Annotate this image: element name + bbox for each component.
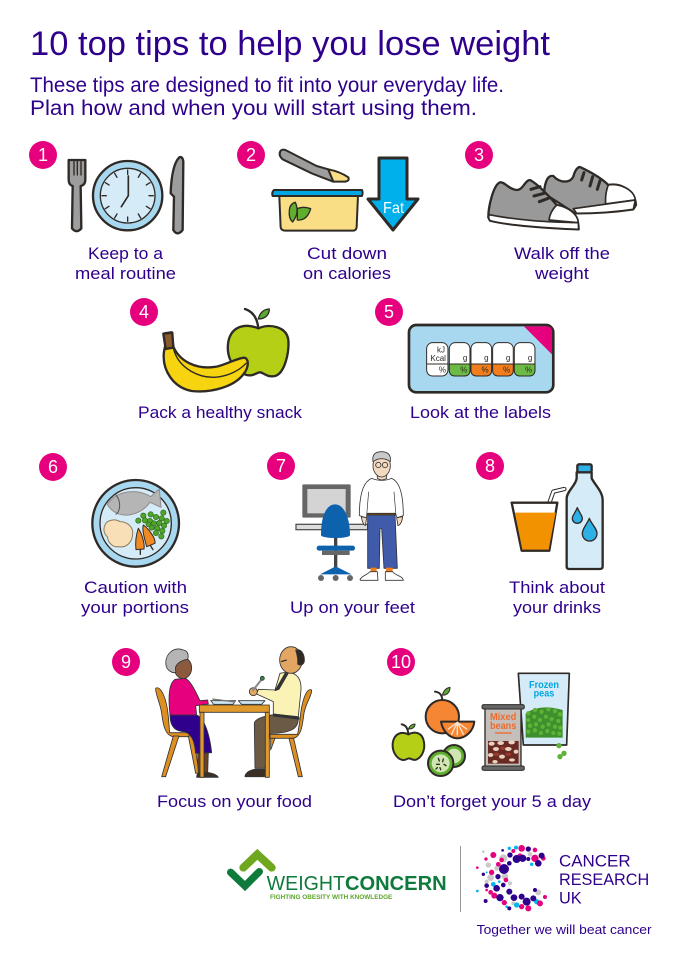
label: Keep to a	[88, 244, 164, 263]
intro text: These tips are designed to fit into your everyday life.	[30, 74, 504, 97]
tip 3: walk off the weight	[465, 141, 636, 283]
label	[303, 244, 391, 283]
logo: Cancer Research UK	[476, 845, 652, 937]
label	[81, 578, 189, 617]
icon: food label: g	[463, 353, 467, 362]
tip 4: healthy snack	[130, 298, 302, 422]
icon: butter knife and tub	[272, 150, 363, 231]
number badge 2	[237, 141, 265, 169]
divider	[460, 846, 461, 912]
icon: standing man	[359, 452, 403, 580]
icon: juice glass and water bottle	[512, 464, 603, 569]
tip 10: five a day	[387, 648, 592, 811]
icon: fat down arrow: Fat	[383, 200, 404, 217]
label: your portions	[81, 598, 189, 617]
number badge 10	[387, 648, 415, 676]
tip 9: focus on your food	[112, 647, 312, 811]
icon: bag of frozen peas: peas	[534, 688, 554, 699]
icon: apple, orange and cucumber	[393, 687, 474, 776]
icon: food label: %	[460, 366, 467, 375]
icon: food label: %	[439, 366, 446, 375]
label: Look at the labels	[410, 403, 551, 422]
number badge 1: 1	[38, 145, 48, 165]
icon: food label: g	[528, 353, 532, 362]
icon: food label: Kcal	[430, 354, 446, 363]
label: Focus on your food	[157, 792, 312, 811]
logo: Cancer Research UK: CANCER	[559, 852, 631, 871]
label: Walk off the	[514, 244, 610, 263]
logo: Weight Concern: WEIGHT	[267, 872, 345, 895]
icon: bag of frozen peas: Frozen	[529, 680, 559, 691]
number badge 9: 9	[121, 652, 131, 672]
label: Don’t forget your 5 a day	[393, 792, 592, 811]
number badge 10: 10	[391, 652, 411, 672]
intro text	[30, 74, 504, 120]
label: Think about	[509, 578, 605, 597]
logo: Weight Concern: FIGHTING OBESITY WITH KNOWLEDGE	[270, 895, 392, 901]
tip 1: meal routine	[29, 141, 183, 283]
number badge 6	[39, 453, 67, 481]
icon: food label: g	[506, 353, 510, 362]
title: 10 top tips to help you lose weight	[30, 25, 551, 63]
icon: food label: g	[484, 353, 489, 362]
label: Caution with	[84, 578, 187, 597]
number badge 3	[465, 141, 493, 169]
tip 8: think about your drinks	[476, 452, 605, 617]
label	[514, 244, 610, 283]
icon: box of mixed beans: beans	[490, 721, 516, 732]
icon: food label: %	[482, 366, 489, 375]
number badge 9	[112, 648, 140, 676]
label: weight	[534, 264, 589, 283]
icon: food label: %	[525, 366, 532, 375]
icon: two people eating at a table	[156, 647, 312, 777]
icon: food label	[409, 325, 553, 392]
icon: desk with monitor and chair	[296, 484, 368, 581]
icon: fat down arrow	[368, 158, 418, 230]
logo: Weight Concern	[231, 854, 447, 901]
tip 2: cut down on calories	[237, 141, 418, 283]
icon: dinner plate with fish, mash, carrots and peas	[92, 480, 179, 567]
number badge 5	[375, 298, 403, 326]
tip 7: up on your feet	[267, 452, 415, 617]
tip 5: look at the labels	[375, 298, 553, 422]
icon: food label: kJ	[437, 345, 445, 354]
logo: Cancer Research UK: UK	[559, 888, 582, 907]
label: Up on your feet	[290, 598, 415, 617]
number badge 5: 5	[384, 302, 394, 322]
label	[75, 244, 176, 283]
logo: Weight Concern: CONCERN	[345, 872, 447, 895]
number badge 6: 6	[48, 457, 58, 477]
logo mark: dotted C	[476, 845, 547, 911]
icon: apple and banana	[163, 309, 288, 391]
logo: Cancer Research UK: RESEARCH	[559, 870, 649, 889]
intro text: Plan how and when you will start using them.	[30, 97, 477, 120]
label: Pack a healthy snack	[138, 403, 302, 422]
icon: box of mixed beans: Mixed	[490, 712, 516, 723]
tip 6: caution with portions	[39, 453, 189, 617]
number badge 4: 4	[139, 302, 149, 322]
label: Cut down	[307, 244, 387, 263]
number badge 1	[29, 141, 57, 169]
label: your drinks	[513, 598, 601, 617]
icon: trainers	[488, 167, 636, 229]
logo: Cancer Research UK: Together we will beat cancer	[477, 922, 652, 937]
icon: box of mixed beans	[482, 705, 524, 770]
label: meal routine	[75, 264, 176, 283]
icon: fork, clock plate, knife	[69, 157, 183, 233]
icon: bag of frozen peas	[518, 673, 569, 759]
number badge 8	[476, 452, 504, 480]
label: on calories	[303, 264, 391, 283]
number badge 8: 8	[485, 456, 495, 476]
number badge 3: 3	[474, 145, 484, 165]
label	[509, 578, 605, 617]
icon: food label: %	[503, 366, 510, 375]
logo mark: chevrons	[231, 854, 272, 886]
number badge 7	[267, 452, 295, 480]
number badge 7: 7	[276, 456, 286, 476]
number badge 4	[130, 298, 158, 326]
number badge 2: 2	[246, 145, 256, 165]
